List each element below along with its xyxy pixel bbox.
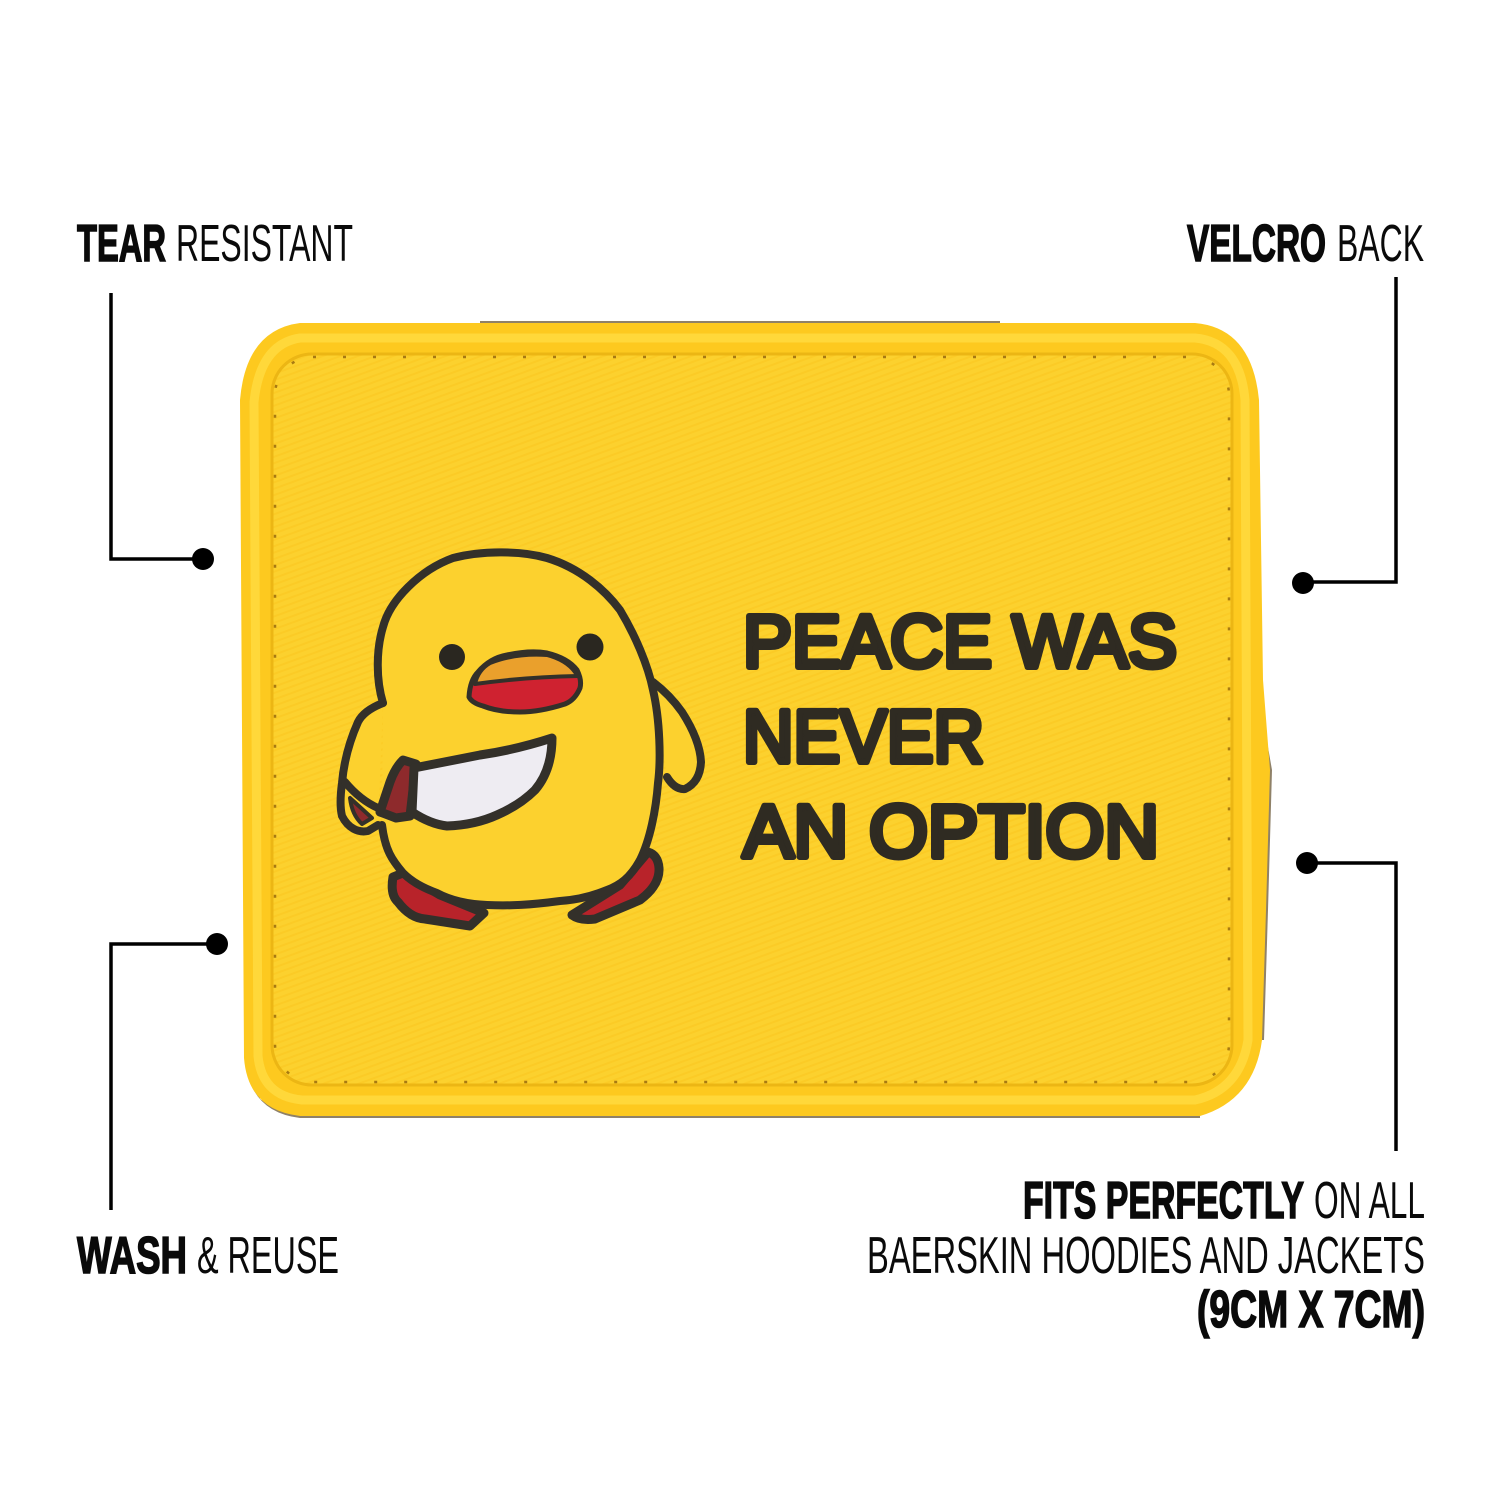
patch border [240,323,1270,1116]
callout: back: BACK [1337,215,1424,273]
callout: reuse: & REUSE [197,1227,339,1285]
callout: velcro: VELCRO [1187,215,1326,273]
callout: wash: WASH [77,1227,187,1285]
duck eye left [439,644,465,670]
beak top [475,655,578,684]
knife blade [412,738,552,826]
slogan line 2: NEVER [743,695,984,778]
callout: tear: TEAR [77,215,166,273]
duck right foot [572,852,659,920]
duck illustration [340,552,701,926]
duck right wing [653,682,701,789]
callout: fits perfectly: FITS PERFECTLY [1023,1172,1304,1230]
duck left foot [392,873,484,926]
duck left wing [340,703,383,831]
patch fabric [272,354,1232,1085]
stitching [275,357,1229,1082]
knife handle [380,760,416,818]
patch [240,321,1272,1118]
leader line: tear [111,293,214,570]
border highlight [254,338,1248,1100]
patch backing [245,321,1272,1118]
fabric edge [272,354,1232,1085]
leader line: velcro [1292,277,1396,594]
duck body [378,552,660,905]
slogan line 1: PEACE WAS [743,600,1177,683]
duck hand [350,798,372,824]
callout: on all: ON ALL [1314,1172,1425,1230]
duck wing inner [345,782,378,808]
leader line: wash [111,933,228,1210]
callout: resistant: RESISTANT [176,215,353,273]
leader line: fits [1296,852,1396,1151]
duck beak [469,652,581,712]
duck eye right [576,634,604,660]
patch slogan [743,600,1177,873]
slogan line 3: AN OPTION [743,790,1159,873]
